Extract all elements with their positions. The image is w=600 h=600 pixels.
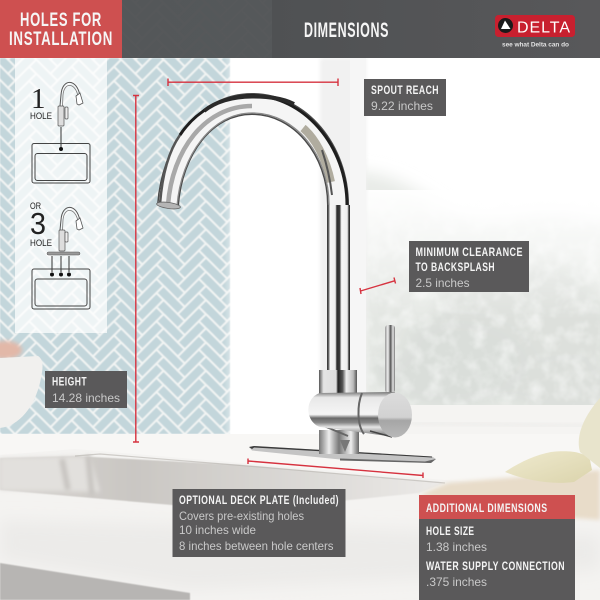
panel heading: ADDITIONAL DIMENSIONS: [426, 503, 548, 515]
spout right reflection: [303, 128, 331, 182]
countertop: [0, 434, 600, 600]
dimension line: height: [133, 96, 139, 442]
end cap: [378, 392, 412, 438]
callout: minimum clearance: [409, 241, 529, 292]
icon: 3 hole option: OR: [30, 201, 41, 212]
counter front shading: [0, 520, 600, 590]
spout: [160, 96, 347, 372]
sink: [0, 456, 445, 505]
spout stem: [327, 205, 350, 372]
base: [319, 426, 359, 454]
dimension line: deck plate: [248, 458, 423, 478]
heading: dimensions: DIMENSIONS: [304, 19, 389, 42]
panel: additional dimensions: .375 inches: [426, 575, 487, 589]
heading: holes for installation: HOLES FOR: [20, 10, 102, 31]
delta logo: [495, 15, 575, 48]
spout centre reflection: [168, 106, 252, 205]
delta logo: DELTA: [517, 20, 570, 36]
panel: additional dimensions: 1.38 inches: [426, 540, 487, 554]
heading: holes for installation: INSTALLATION: [9, 29, 113, 50]
spout inner edge: [177, 113, 329, 206]
callout: minimum clearance: MINIMUM CLEARANCE: [416, 247, 523, 259]
callout: height: HEIGHT: [52, 376, 87, 388]
dimension line: clearance: [360, 278, 396, 294]
barrel handle: [308, 392, 395, 437]
dimension line: spout reach: [168, 78, 338, 86]
lever handle: [385, 325, 395, 393]
icon: 1 hole option: [30, 82, 90, 183]
callout: height: 14.28 inches: [52, 391, 120, 405]
trees through window: [366, 170, 600, 405]
panel: holes for installation: [15, 58, 107, 333]
callout: optional deck plate: 10 inches wide: [179, 523, 256, 537]
bowl and fruit: [0, 341, 22, 359]
window sill: [400, 405, 600, 437]
delta logo: see what Delta can do: [502, 42, 569, 48]
callout: optional deck plate: Covers pre-existing holes: [179, 509, 304, 523]
lemons and cutting board: [419, 470, 600, 520]
callout: optional deck plate: OPTIONAL DECK PLATE (Included): [179, 495, 339, 507]
collar: [319, 370, 357, 398]
callout: minimum clearance: 2.5 inches: [416, 276, 470, 290]
window frame: [320, 58, 366, 408]
callout: minimum clearance: TO BACKSPLASH: [416, 262, 495, 274]
panel: additional dimensions: HOLE SIZE: [426, 526, 474, 538]
icon: 3 hole option: 3: [30, 206, 46, 241]
faucet: [156, 96, 436, 463]
icon: 3 hole option: [30, 201, 90, 309]
tile backsplash: [0, 58, 230, 434]
icon: 1 hole option: 1: [31, 83, 46, 115]
panel heading: [419, 495, 575, 519]
callout: spout reach: SPOUT REACH: [371, 85, 439, 97]
callout: spout reach: 9.22 inches: [371, 99, 433, 113]
panel: additional dimensions: [419, 495, 575, 600]
callout: spout reach: [364, 79, 446, 116]
spout top dark band: [204, 96, 294, 111]
icon: 1 hole option: HOLE: [30, 111, 52, 122]
heading: holes for installation: [0, 0, 122, 58]
callout: optional deck plate: [172, 489, 346, 557]
deck plate: [249, 446, 436, 463]
spout outlet: [156, 201, 181, 210]
spout outer dark edge: [180, 96, 347, 205]
icon: 3 hole option: HOLE: [30, 238, 52, 249]
callout: optional deck plate: 8 inches between hole centers: [179, 539, 334, 553]
header bar: [0, 0, 600, 58]
callout: height: [45, 371, 127, 408]
